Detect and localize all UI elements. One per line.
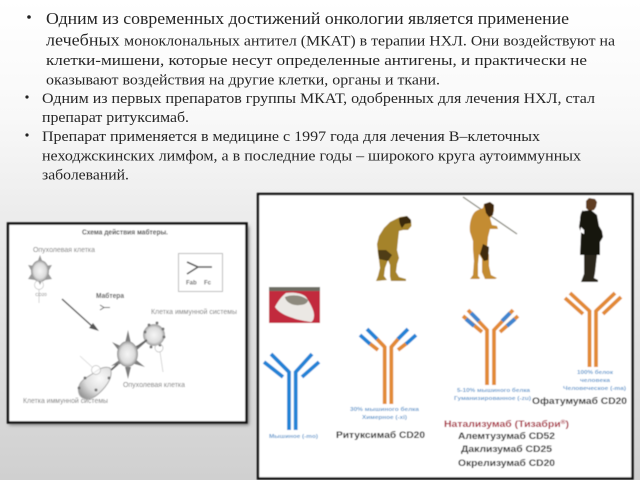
label: tumor cell bottom: Опухолевая клетка [123, 382, 185, 389]
bullet 1: оказывают воздействия на другие клетки, органы и ткани. [46, 72, 440, 88]
bullet 2: препарат ритуксимаб. [42, 110, 189, 126]
icon: tumor cell top [28, 255, 52, 303]
icon: immune cell lower-left [78, 356, 111, 399]
figure: ape [376, 216, 412, 281]
label: immune cell bottom: Клетка иммунной системы [23, 397, 108, 405]
drug label: natalizumab: ) [566, 419, 569, 430]
scheme title: Схема действия мабтеры. [82, 228, 168, 236]
label: chimeric share [350, 406, 420, 421]
drug label: alemtuzumab: Алемтузумаб CD52 [458, 431, 555, 442]
panel: antibody evolution [258, 194, 635, 480]
antibody: chimeric [360, 329, 416, 404]
bullet 1 [27, 9, 616, 88]
bullet 1: клетки-мишени, которые несут определенные антигены, и практически не [46, 53, 587, 69]
bullet 2: Одним из первых препаратов группы МКАТ, одобренных для лечения НХЛ, стал [42, 91, 596, 107]
inset: antibody Fab Fc: Fc [204, 280, 212, 286]
label: Mabthera with antibody icon [96, 292, 124, 310]
bullet 2 [25, 91, 596, 126]
label: human share: 100% белок [577, 369, 613, 376]
drug label: ofatumumab: Офатумумаб CD20 [532, 396, 627, 407]
bullet 3 [25, 129, 582, 184]
label: chimeric share: Химерное (-xi) [362, 415, 407, 421]
panel: mabthera mechanism scheme [8, 224, 249, 425]
figure: spear man [463, 197, 517, 279]
text block: intro paragraphs [25, 9, 616, 184]
icon: tumor cell top: CD20 [35, 292, 47, 297]
label: human share: человека [580, 378, 611, 384]
label: human share [563, 369, 626, 392]
bullet 3: неходжскинских лимфом, а в последние годы – широкого круга аутоиммунных [42, 148, 582, 164]
antibody: human [565, 293, 621, 367]
bullet 3: заболеваний. [42, 168, 129, 184]
bullet 1: Одним из современных достижений онкологии является применение [46, 9, 569, 28]
label: human share: Человеческое (-ma) [563, 386, 626, 392]
inset: antibody Fab Fc: Fab [186, 280, 197, 286]
label: mouse antibody: Мышиное (-mo) [269, 434, 318, 440]
label: tumor cell top: Опухолевая клетка [33, 247, 95, 254]
label: immune cell right: Клетка иммунной системы [151, 308, 237, 316]
label: humanized share: Гуманизированное (-zu) [454, 396, 531, 402]
drug label: rituximab: Ритуксимаб CD20 [336, 430, 425, 440]
drug label: ocrelizumab: Окрелизумаб CD20 [458, 458, 555, 469]
antibody: humanized [463, 310, 518, 385]
inset: antibody Fab Fc [178, 254, 222, 292]
drug label: daclizumab: Даклизумаб CD25 [461, 444, 553, 455]
label: humanized share [454, 387, 531, 402]
antibody: mouse [264, 354, 319, 430]
figure: modern man [579, 198, 603, 282]
label: Mabthera with antibody icon: Мабтера [96, 292, 124, 300]
label: chimeric share: 30% мышиного белка [350, 406, 420, 413]
arrow [62, 299, 99, 331]
drug label: natalizumab: ® [561, 419, 566, 426]
bullet 3: Препарат применяется в медицине с 1997 года для лечения В–клеточных [42, 129, 541, 145]
bullet 1: лечебных моноклональных антител (МКАТ) в терапии НХЛ. Они воздействуют на [46, 30, 616, 50]
icon: immune cell right [144, 322, 166, 372]
icon: tumor cell center [111, 330, 147, 379]
drug label: natalizumab: Натализумаб (Тизабри [444, 419, 550, 430]
photo: mouse [269, 287, 320, 323]
label: humanized share: 5-10% мышиного белка [457, 387, 531, 394]
